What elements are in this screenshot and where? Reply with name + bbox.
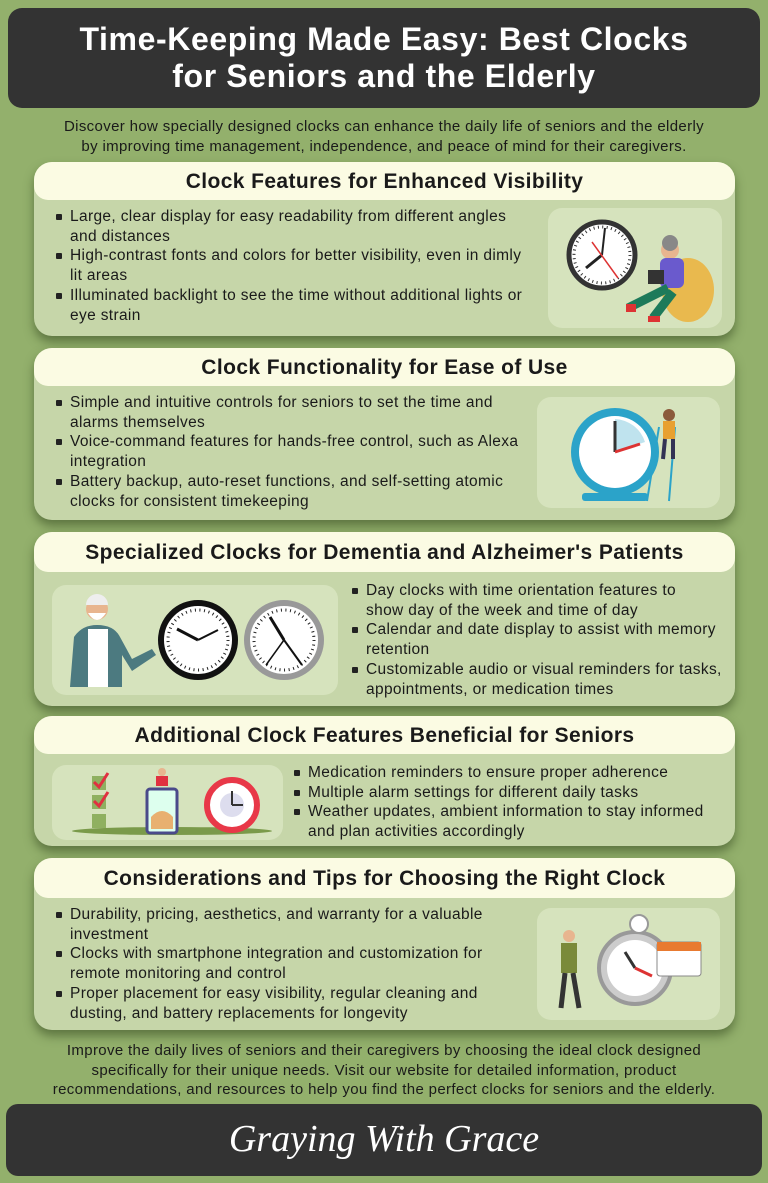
panel: visibility: [34, 162, 735, 336]
illustration: elderly man with stopwatch and calendar: [537, 908, 720, 1020]
bullet list: and distances: [70, 228, 170, 245]
heading: Clock Functionality for Ease of Use: [201, 356, 568, 379]
illustration: big clock with ladder: [537, 397, 720, 508]
panel: dementia: [34, 532, 735, 706]
bullet list: [294, 764, 704, 840]
illustration: clock and man with laptop: [548, 208, 722, 328]
bullet list: Weather updates, ambient information to stay informed: [308, 803, 704, 820]
bullet list: Large, clear display for easy readability from different angles: [70, 208, 506, 225]
bullet list: Calendar and date display to assist with memory: [366, 621, 716, 638]
subtitle: by improving time management, independence, and peace of mind for their caregivers.: [81, 138, 687, 154]
illustration: checklist hourglass alarm clock: [52, 765, 283, 840]
bullet list: show day of the week and time of day: [366, 602, 638, 619]
bullet list: Day clocks with time orientation features to: [366, 582, 676, 599]
heading: Considerations and Tips for Choosing the Right Clock: [104, 867, 665, 890]
bullet list: alarms themselves: [70, 414, 205, 431]
bullet list: [56, 208, 522, 324]
panel: additional features: [34, 716, 735, 846]
closing text: Improve the daily lives of seniors and their caregivers by choosing the ideal clock designed: [67, 1042, 701, 1059]
closing text: specifically for their unique needs. Visit our website for detailed information, product: [92, 1062, 676, 1078]
footer brand: [6, 1104, 762, 1176]
panel: functionality: [34, 348, 735, 520]
bullet list: Simple and intuitive controls for seniors to set the time and: [70, 394, 493, 411]
heading: Clock Features for Enhanced Visibility: [186, 170, 583, 193]
bullet list: and plan activities accordingly: [308, 823, 525, 840]
bullet list: retention: [366, 641, 429, 658]
illustration: man with two clocks: [52, 585, 338, 695]
title: Time-Keeping Made Easy: Best Clocks: [79, 21, 689, 57]
bullet list: dusting, and battery replacements for longevity: [70, 1005, 408, 1022]
bullet list: lit areas: [70, 267, 127, 284]
closing text: recommendations, and resources to help you find the perfect clocks for seniors and the elderly.: [53, 1081, 715, 1098]
bullet list: Customizable audio or visual reminders for tasks,: [366, 661, 722, 678]
bullet list: Battery backup, auto-reset functions, and self-setting atomic: [70, 473, 503, 490]
footer brand: Graying With Grace: [229, 1118, 539, 1160]
heading: [34, 532, 735, 572]
heading: [34, 858, 735, 898]
bullet list: [352, 582, 722, 698]
bullet list: High-contrast fonts and colors for better visibility, even in dimly: [70, 247, 521, 264]
bullet list: remote monitoring and control: [70, 965, 286, 982]
title: [8, 8, 760, 108]
bullet list: Clocks with smartphone integration and customization for: [70, 945, 482, 962]
subtitle: [64, 118, 704, 154]
bullet list: Durability, pricing, aesthetics, and warranty for a valuable: [70, 906, 483, 923]
bullet list: clocks for consistent timekeeping: [70, 493, 309, 510]
heading: Additional Clock Features Beneficial for Seniors: [134, 724, 634, 747]
heading: Specialized Clocks for Dementia and Alzheimer's Patients: [85, 541, 684, 564]
bullet list: Medication reminders to ensure proper adherence: [308, 764, 668, 781]
bullet list: [56, 394, 518, 510]
bullet list: Proper placement for easy visibility, regular cleaning and: [70, 985, 478, 1002]
bullet list: appointments, or medication times: [366, 681, 614, 698]
bullet list: investment: [70, 926, 148, 943]
bullet list: Multiple alarm settings for different daily tasks: [308, 784, 638, 801]
title: for Seniors and the Elderly: [172, 58, 596, 94]
bullet list: integration: [70, 453, 146, 470]
bullet list: eye strain: [70, 307, 141, 324]
bullet list: Illuminated backlight to see the time without additional lights or: [70, 287, 522, 304]
panel: considerations: [34, 858, 735, 1030]
heading: [34, 348, 735, 386]
bullet list: [56, 906, 483, 1022]
bullet list: Voice-command features for hands-free control, such as Alexa: [70, 433, 518, 450]
closing text: [53, 1042, 715, 1098]
heading: [34, 716, 735, 754]
heading: [34, 162, 735, 200]
subtitle: Discover how specially designed clocks can enhance the daily life of seniors and the elderly: [64, 118, 704, 135]
